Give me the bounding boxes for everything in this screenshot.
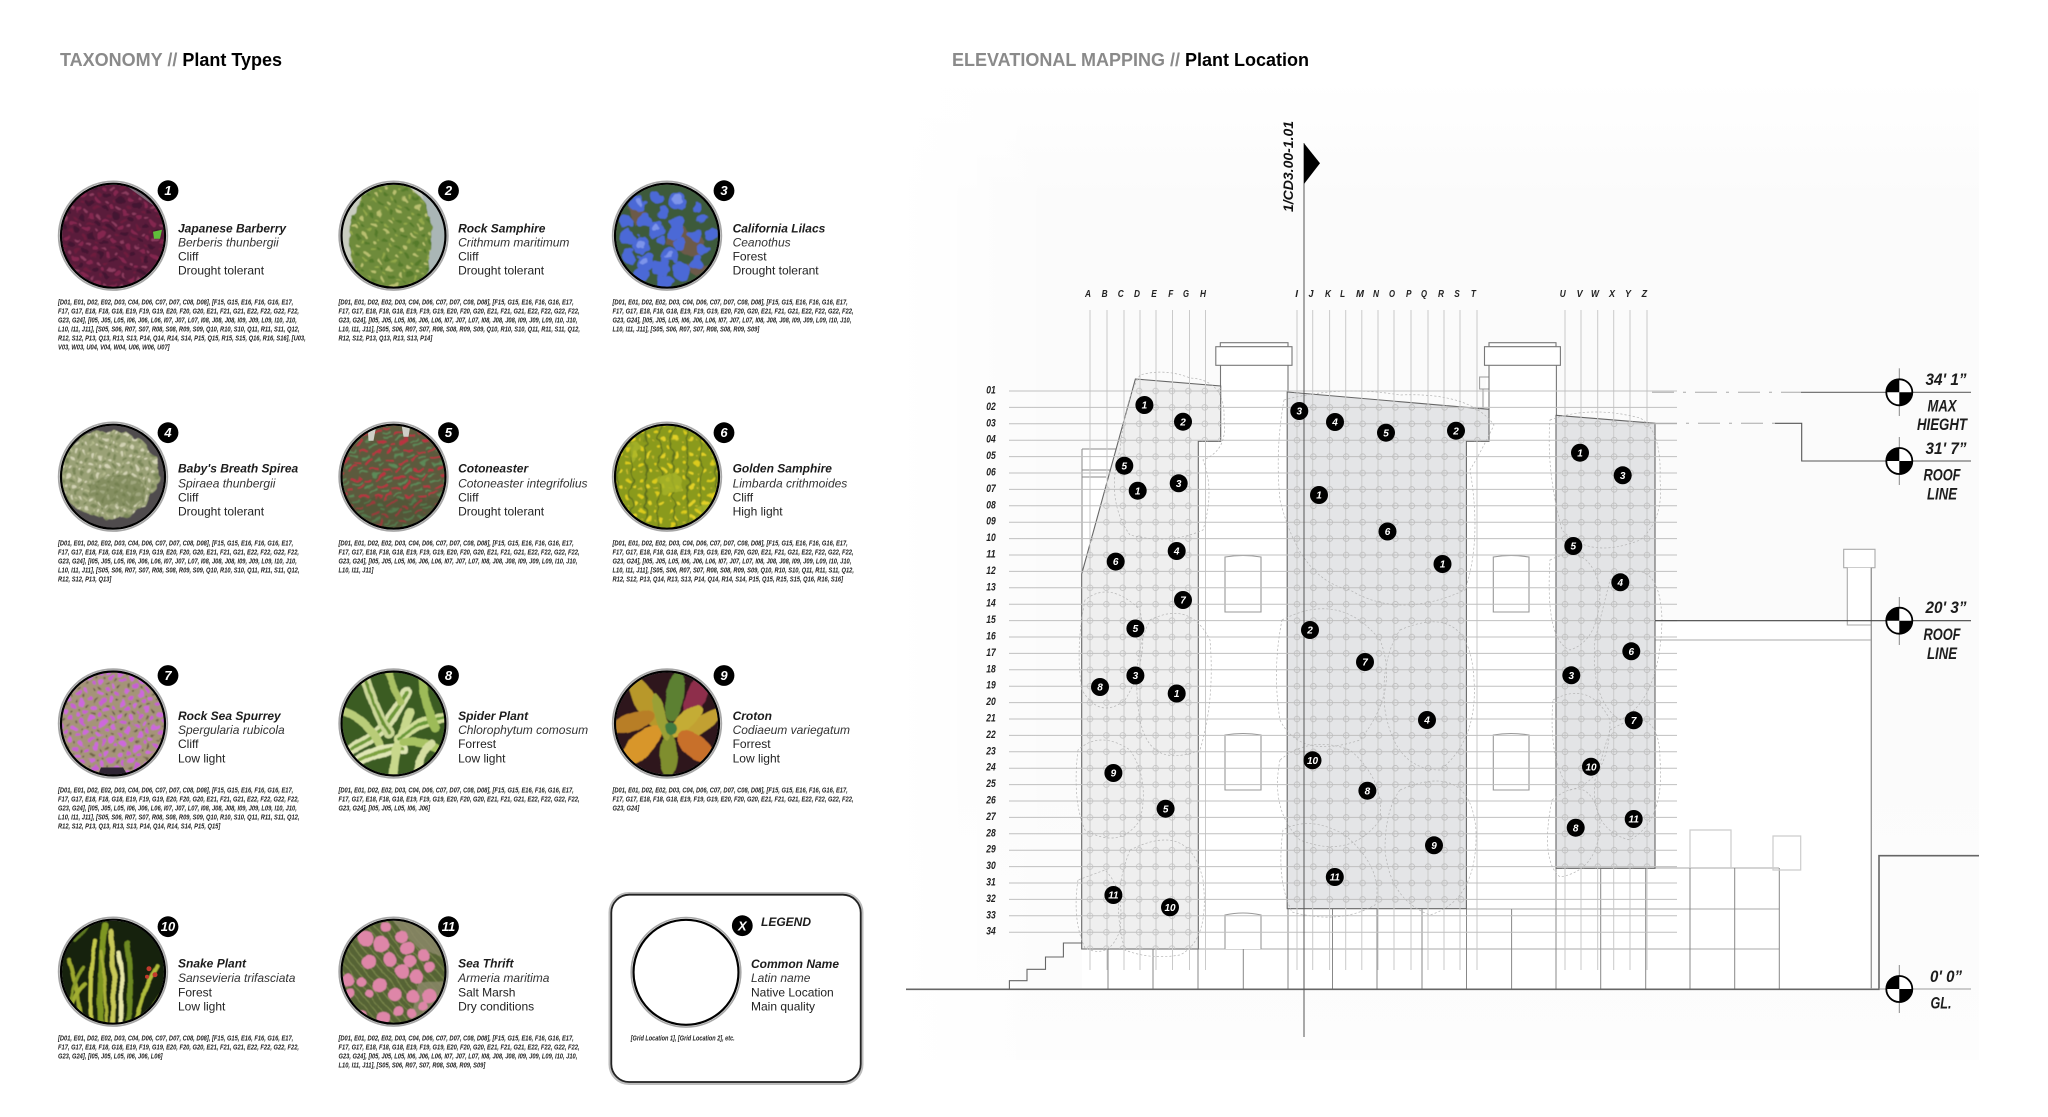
grid locations: F17, G17, E18, F18, G18, E19, F19, G19, E20, F20, G20, E21, F21, G21, E22, F22, G22, F22, — [338, 1044, 580, 1052]
row numbers: 03 — [986, 417, 996, 429]
plant markers panel 3: 5 — [1571, 542, 1577, 553]
level marker: roof line 31 ft 7 — [1655, 423, 1971, 503]
number badge 4 — [158, 422, 178, 443]
plant markers panel 3: 3 — [1569, 671, 1575, 682]
plant markers panel 1: 6 — [1113, 557, 1119, 568]
row numbers: 22 — [985, 729, 996, 741]
plant description: Drought tolerant — [458, 505, 545, 519]
column letters: Y — [1625, 288, 1632, 300]
legend key text: Latin name — [751, 971, 811, 985]
row numbers: 28 — [985, 827, 996, 839]
grid locations: G23, G24], [I05, J05, L05, I06, J06, L06, I07, J07, L07, I08, J08, J08, I09, J09, L09, I10, J10, — [338, 558, 577, 566]
photo: Sea Thrift — [338, 916, 449, 1027]
column letters: J — [1308, 288, 1314, 300]
chart: elevation drawing — [906, 80, 1979, 1060]
photo: Croton — [612, 668, 722, 779]
plant markers panel 1: 1 — [1142, 401, 1148, 412]
column letters: B — [1102, 288, 1108, 300]
grid locations: [D01, E01, D02, E02, D03, C04, D06, C07, D07, C08, D08], [F15, G15, E16, F16, G16, E17, — [338, 787, 574, 795]
plant description: Forest — [733, 249, 767, 263]
plant description: Low light — [178, 752, 226, 766]
level marker: max height: 34' 1” — [1926, 370, 1967, 389]
card: Croton — [607, 664, 854, 813]
number badge 5: 5 — [445, 425, 453, 440]
grid locations: F17, G17, E18, F18, G18, E19, F19, G19, E20, F20, G20, E21, F21, G21, E22, F22, G22, F22, — [612, 308, 854, 316]
grid locations: L10, I11, J11] — [338, 567, 374, 575]
row numbers: 32 — [986, 893, 996, 905]
plant markers panel 1: 7 — [1180, 596, 1186, 607]
plant markers panel 2 — [1290, 402, 1465, 886]
plant markers panel 1: 1 — [1174, 689, 1180, 700]
plant description: Ceanothus — [733, 235, 791, 249]
plant description — [733, 709, 850, 766]
heading: taxonomy: TAXONOMY // Plant Types — [60, 50, 282, 70]
number badge 6 — [714, 422, 734, 443]
grid locations: F17, G17, E18, F18, G18, E19, F19, G19, E20, F20, G20, E21, F21, G21, E22, F22, G22, F22, — [612, 549, 854, 557]
plant description: Cliff — [178, 249, 199, 263]
plant description: Cliff — [178, 737, 199, 751]
column letters: D — [1134, 288, 1140, 300]
row numbers: 18 — [986, 663, 996, 675]
plant description: Drought tolerant — [733, 264, 819, 278]
grid locations: G23, G24], [I05, J05, L05, I06, J06] — [338, 805, 431, 813]
grid locations: [D01, E01, D02, E02, D03, C04, D06, C07, D07, C08, D08], [F15, G15, E16, F16, G16, E17, — [612, 540, 848, 548]
number badge 5 — [438, 422, 459, 443]
column letters: R — [1438, 288, 1444, 300]
plant description: Forest — [178, 985, 213, 999]
grid locations: G23, G24], [I05, J05, L05, I06, J06, L06, I07, J07, L07, I08, J08, J08, I09, J09, L09, I10, J10, — [338, 317, 577, 325]
row numbers: 25 — [985, 778, 996, 790]
plant description — [457, 957, 550, 1014]
plant description — [178, 222, 287, 278]
row numbers: 16 — [986, 630, 996, 642]
grid locations: G23, G24], [I05, J05, L05, I06, J06, L06, I07, J07, L07, I08, J08, J08, I09, J09, L09, I10, J10, — [612, 558, 851, 566]
plant description: Baby's Breath Spirea — [178, 462, 299, 476]
card: Rock Sea Spurrey — [53, 664, 300, 831]
grid locations: G23, G24], [I05, J05, L05, I06, J06, L06, I07, J07, L07, I08, J08, J08, I09, J09, L09, I10, J10, — [58, 805, 297, 813]
row numbers: 01 — [986, 384, 996, 396]
row numbers: 31 — [986, 876, 996, 888]
grid locations: R12, S12, P13, Q13, R13, S13, P14] — [338, 335, 433, 343]
plant description: Armeria maritima — [457, 971, 550, 985]
plant description: Cliff — [458, 490, 479, 504]
photo: Cotoneaster — [338, 422, 449, 532]
photo: Rock Samphire — [338, 180, 449, 291]
level marker: ground level: 0' 0” — [1930, 967, 1962, 986]
column letters: H — [1200, 288, 1206, 300]
plant description: Low light — [178, 1000, 226, 1014]
number badge 2 — [438, 180, 459, 201]
plant description: Spergularia rubicola — [178, 723, 285, 737]
photo: Snake Plant — [58, 916, 168, 1027]
card: Cotoneaster — [334, 417, 588, 575]
row numbers: 14 — [986, 598, 996, 610]
grid locations: L10, I11, J11], [S05, S06, R07, S07, R08, S08, R09, S09, Q10, R10, S10, Q11, R11, S11, Q12, — [58, 567, 300, 575]
grid locations: R12, S12, P13, Q13] — [58, 576, 112, 584]
plant description: Drought tolerant — [178, 505, 265, 519]
grid locations: [D01, E01, D02, E02, D03, C04, D06, C07, D07, C08, D08], [F15, G15, E16, F16, G16, E17, — [57, 299, 293, 307]
plant description: Codiaeum variegatum — [733, 723, 850, 737]
plant description: Crithmum maritimum — [458, 235, 569, 249]
plant markers panel 3: 8 — [1573, 823, 1579, 834]
grid locations: [D01, E01, D02, E02, D03, C04, D06, C07, D07, C08, D08], [F15, G15, E16, F16, G16, E17, — [612, 787, 848, 795]
plant markers panel 1: 9 — [1111, 769, 1117, 780]
level marker: ground level — [1879, 965, 1971, 1013]
plant markers panel 1: 5 — [1122, 461, 1128, 472]
photo: Japanese Barberry — [58, 180, 168, 291]
grid locations: L10, I11, J11], [S05, S06, R07, S07, R08, S08, R09, S09, Q10, R10, S10, Q11, R11, S11, Q12, — [338, 326, 580, 334]
row numbers: 11 — [986, 548, 996, 560]
plant markers panel 2: 11 — [1330, 873, 1340, 884]
grid locations: G23, G24], [I05, J05, L05, I06, J06, L06, I07, J07, L07, I08, J08, J08, I09, J09, L09, I10, J10, — [612, 317, 851, 325]
row numbers: 15 — [986, 614, 996, 626]
row numbers: 07 — [986, 483, 996, 495]
plant markers panel 3: 11 — [1629, 815, 1639, 826]
plant markers panel 1: 1 — [1135, 486, 1141, 497]
plant description: Cliff — [178, 490, 199, 504]
row numbers: 12 — [986, 565, 996, 577]
grid locations: G23, G24] — [612, 805, 640, 813]
card: Golden Samphire — [607, 417, 854, 584]
card: Spider Plant — [334, 664, 588, 813]
row numbers: 08 — [986, 499, 996, 511]
column letters: V — [1577, 288, 1583, 300]
grid locations: F17, G17, E18, F18, G18, E19, F19, G19, E20, F20, G20, E21, F21, G21, E22, F22, G22, F22, — [338, 549, 580, 557]
plant description: Dry conditions — [458, 1000, 534, 1014]
plant description: Cliff — [733, 490, 754, 504]
row numbers — [985, 384, 996, 938]
plant description — [178, 462, 299, 519]
row numbers: 19 — [986, 680, 996, 692]
plant description: Rock Samphire — [458, 222, 546, 236]
column letters: C — [1118, 288, 1124, 300]
plant description: High light — [733, 505, 783, 519]
chimney left — [1216, 343, 1292, 392]
windows — [1225, 556, 1529, 949]
grid locations: [D01, E01, D02, E02, D03, C04, D06, C07, D07, C08, D08], [F15, G15, E16, F16, G16, E17, — [338, 1035, 574, 1043]
column letters: O — [1389, 288, 1395, 300]
plant markers panel 2: 10 — [1307, 756, 1318, 767]
plant markers panel 2: 9 — [1431, 841, 1437, 852]
plant markers panel 3: 7 — [1631, 716, 1637, 727]
number badge 9: 9 — [720, 668, 728, 683]
level marker: roof line 31 ft 7: ROOF — [1924, 466, 1961, 485]
plant description: Snake Plant — [178, 957, 247, 971]
row numbers: 13 — [986, 581, 996, 593]
row numbers: 23 — [985, 745, 996, 757]
building silhouette — [1082, 343, 1871, 989]
plant description: Chlorophytum comosum — [458, 723, 588, 737]
row numbers: 09 — [986, 516, 996, 528]
plant markers panel 3: 1 — [1577, 448, 1583, 459]
legend sample circle — [631, 918, 741, 1027]
plant description: Japanese Barberry — [178, 222, 287, 236]
plant description — [458, 462, 588, 519]
number badge 7 — [158, 665, 178, 686]
row numbers: 02 — [986, 401, 996, 413]
plant markers panel 1: 8 — [1097, 683, 1103, 694]
grid locations: F17, G17, E18, F18, G18, E19, F19, G19, E20, F20, G20, E21, F21, G21, E22, F22, G22, F22, — [58, 549, 299, 557]
plant description: Drought tolerant — [178, 264, 265, 278]
photo: Spider Plant — [338, 668, 449, 779]
chimney right — [1484, 343, 1560, 415]
plant markers panel 2: 3 — [1297, 407, 1303, 418]
column letters: W — [1591, 288, 1600, 300]
number badge 8 — [438, 665, 459, 686]
card: Snake Plant — [53, 912, 299, 1061]
plant description: Golden Samphire — [733, 462, 832, 476]
row numbers: 34 — [986, 926, 996, 938]
level marker: roof line 20 ft 3: LINE — [1927, 644, 1958, 663]
grid locations: R12, S12, P13, Q13, R13, S13, P14, Q14, R14, S14, P15, Q15, R15, S15, Q16, R16, S16], [U03, — [58, 335, 306, 343]
column letters: G — [1183, 288, 1189, 300]
number badge 1 — [158, 180, 178, 201]
grid locations: L10, I11, J11], [S05, S06, R07, S07, R08, S08, R09, S09] — [612, 326, 760, 334]
plant description: Sansevieria trifasciata — [178, 971, 296, 985]
column letters: E — [1151, 288, 1158, 300]
plant description: Forrest — [733, 737, 771, 751]
grid locations: F17, G17, E18, F18, G18, E19, F19, G19, E20, F20, G20, E21, F21, G21, E22, F22, G22, F22, — [612, 796, 854, 804]
grid locations: G23, G24], [I05, J05, L05, I06, J06, L06] — [58, 1053, 163, 1061]
plant markers panel 1: 3 — [1133, 671, 1139, 682]
plant markers panel 2: 4 — [1331, 418, 1338, 429]
row numbers: 29 — [985, 844, 996, 856]
ground line — [906, 856, 1979, 989]
plant markers panel 3: 10 — [1585, 762, 1597, 773]
number badge 3 — [714, 180, 734, 201]
plant description — [458, 709, 588, 766]
plant markers panel 1: 5 — [1133, 624, 1139, 635]
plant markers panel 2: 4 — [1423, 716, 1430, 727]
level marker: roof line 31 ft 7: 31' 7” — [1926, 439, 1967, 458]
plant markers panel 3 — [1562, 444, 1643, 837]
column letters: F — [1168, 288, 1174, 300]
small chimney — [1844, 549, 1875, 625]
plant description: Rock Sea Spurrey — [178, 709, 282, 723]
photo: California Lilacs — [612, 180, 722, 291]
panel: legend — [610, 894, 862, 1084]
number badge 11: 11 — [442, 919, 455, 934]
photo: Golden Samphire — [612, 422, 722, 532]
grid locations: V03, W03, U04, V04, W04, U06, W06, U07] — [58, 344, 170, 352]
column letters — [1084, 288, 1648, 300]
number badge 7: 7 — [164, 668, 172, 683]
plant description — [733, 462, 847, 519]
legend key text: Common Name — [751, 957, 839, 971]
grid locations: [D01, E01, D02, E02, D03, C04, D06, C07, D07, C08, D08], [F15, G15, E16, F16, G16, E17, — [612, 299, 848, 307]
plant markers panel 1: 4 — [1173, 547, 1180, 558]
plant description — [733, 222, 826, 278]
section label: 1/CD3.00-1.01 — [1280, 121, 1296, 212]
grid locations: [D01, E01, D02, E02, D03, C04, D06, C07, D07, C08, D08], [F15, G15, E16, F16, G16, E17, — [338, 540, 574, 548]
plant description: Berberis thunbergii — [178, 235, 279, 249]
plant markers panel 1 — [1091, 396, 1192, 916]
section line — [1304, 143, 1320, 1037]
card: California Lilacs — [607, 176, 854, 334]
grid locations: R12, S12, P13, Q14, R13, S13, P14, Q14, R14, S14, P15, Q15, R15, S15, Q16, R16, S16] — [612, 576, 844, 584]
wall edge line — [1870, 568, 1872, 989]
plant description: California Lilacs — [733, 222, 826, 236]
row numbers: 24 — [985, 762, 996, 774]
column letters: S — [1454, 288, 1460, 300]
grid locations: F17, G17, E18, F18, G18, E19, F19, G19, E20, F20, G20, E21, F21, G21, E22, F22, G22, F22, — [58, 1044, 299, 1052]
grid locations: L10, I11, J11], [S05, S06, R07, S07, R08, S08, R09, S09, Q10, R10, S10, Q11, R11, S11, Q12, — [58, 814, 300, 822]
level marker: roof line 20 ft 3: 20' 3” — [1925, 598, 1967, 617]
row numbers: 30 — [986, 860, 996, 872]
legend key text: Main quality — [751, 1000, 815, 1014]
level marker: ground level: GL. — [1930, 994, 1952, 1013]
grid locations: G23, G24], [I05, J05, L05, I06, J06, L06, I07, J07, L07, I08, J08, J08, I09, J09, L09, I10, J10, — [58, 317, 297, 325]
column letters: P — [1406, 288, 1412, 300]
grid locations: L10, I11, J11], [S05, S06, R07, S07, R08, S08, R09, S09, Q10, R10, S10, Q11, R11, S11, Q12, — [612, 567, 854, 575]
level marker: roof line 31 ft 7: LINE — [1927, 484, 1958, 503]
plant markers panel 3: 4 — [1617, 578, 1624, 589]
plant markers panel 2: 8 — [1365, 786, 1371, 797]
column letters: K — [1325, 288, 1332, 300]
plant description: Low light — [458, 752, 506, 766]
column letters: A — [1084, 288, 1091, 300]
legend key text: Native Location — [751, 986, 834, 1000]
photo: Rock Sea Spurrey — [58, 668, 168, 779]
plant markers panel 2: 1 — [1440, 560, 1446, 571]
plant markers panel 2: 2 — [1452, 426, 1459, 437]
plant description — [178, 709, 285, 766]
grid locations: L10, I11, J11], [S05, S06, R07, S07, R08, S08, R09, S09, Q10, R10, S10, Q11, R11, S11, Q12, — [58, 326, 300, 334]
plant markers panel 3: 3 — [1620, 471, 1626, 482]
plant markers panel 2: 6 — [1385, 527, 1391, 538]
card: Sea Thrift — [334, 912, 580, 1070]
row numbers: 06 — [986, 466, 996, 478]
column letters: Z — [1641, 288, 1648, 300]
grid nodes — [1082, 379, 1655, 949]
legend badge X — [732, 915, 753, 936]
row numbers: 17 — [986, 647, 996, 659]
number badge 4: 4 — [163, 425, 172, 440]
column letters: X — [1608, 288, 1616, 300]
number badge 3: 3 — [720, 183, 728, 198]
level marker: roof line 20 ft 3 — [1655, 597, 1971, 663]
row numbers: 05 — [986, 450, 996, 462]
structural lines — [1082, 377, 1871, 989]
column letters: U — [1560, 288, 1566, 300]
plant description: Low light — [733, 752, 781, 766]
level marker: max height: HIEGHT — [1917, 415, 1968, 434]
grid locations: G23, G24], [I05, J05, L05, I06, J06, L06, I07, J07, L07, I08, J08, J08, I09, J09, L09, I10, J10, — [58, 558, 297, 566]
number badge 10 — [158, 916, 178, 937]
column letters: I — [1295, 288, 1299, 300]
plant description: Cotoneaster integrifolius — [458, 476, 588, 490]
column letters: L — [1340, 288, 1345, 300]
plant markers panel 1: 2 — [1179, 417, 1186, 428]
plant markers panel 1: 11 — [1108, 891, 1119, 902]
legend heading: LEGEND — [761, 915, 811, 929]
grid locations: [D01, E01, D02, E02, D03, C04, D06, C07, D07, C08, D08], [F15, G15, E16, F16, G16, E17, — [338, 299, 574, 307]
legend badge X: X — [737, 918, 748, 934]
grid locations: F17, G17, E18, F18, G18, E19, F19, G19, E20, F20, G20, E21, F21, G21, E22, F22, G22, F22, — [338, 308, 580, 316]
grid locations: R12, S12, P13, Q13, R13, S13, P14, Q14, R14, S14, P15, Q15] — [58, 823, 221, 831]
number badge 9 — [714, 665, 734, 686]
number badge 2: 2 — [444, 183, 453, 198]
number badge 10: 10 — [161, 919, 176, 934]
row numbers: 04 — [986, 434, 996, 446]
plant markers panel 2: 7 — [1362, 658, 1368, 669]
card: Baby's Breath Spirea — [53, 417, 300, 584]
number badge 8: 8 — [445, 668, 453, 683]
column letters: T — [1471, 288, 1477, 300]
number badge 6: 6 — [720, 425, 728, 440]
planted wall panel 2 — [1287, 392, 1489, 909]
plant markers panel 2: 5 — [1383, 428, 1389, 439]
heading: elevational mapping: ELEVATIONAL MAPPING // Plant Location — [952, 50, 1309, 70]
left fade — [906, 80, 1056, 1060]
grid lines — [1009, 310, 1677, 970]
plant description: Limbarda crithmoides — [733, 476, 847, 490]
plant description: Sea Thrift — [458, 957, 514, 971]
row numbers: 26 — [985, 794, 996, 806]
plant markers panel 1: 10 — [1164, 903, 1176, 914]
plant description: Salt Marsh — [458, 985, 515, 999]
stairs — [1009, 943, 1082, 989]
grid locations: [D01, E01, D02, E02, D03, C04, D06, C07, D07, C08, D08], [F15, G15, E16, F16, G16, E17, — [57, 540, 293, 548]
level marker: max height — [1652, 368, 1971, 434]
plant markers panel 1: 5 — [1163, 804, 1169, 815]
plant description: Croton — [733, 709, 772, 723]
column letters: N — [1373, 288, 1379, 300]
grid locations: F17, G17, E18, F18, G18, E19, F19, G19, E20, F20, G20, E21, F21, G21, E22, F22, G22, F22, — [338, 796, 580, 804]
drawing background — [906, 80, 1979, 1060]
plant markers panel 2: 1 — [1316, 491, 1322, 502]
plant markers panel 3: 6 — [1629, 647, 1635, 658]
number badge 1: 1 — [164, 183, 172, 198]
legend key text — [751, 957, 839, 1014]
level marker: max height: MAX — [1928, 397, 1958, 416]
grid locations: F17, G17, E18, F18, G18, E19, F19, G19, E20, F20, G20, E21, F21, G21, E22, F22, G22, F22, — [58, 308, 299, 316]
row numbers: 21 — [985, 712, 996, 724]
grid locations: [D01, E01, D02, E02, D03, C04, D06, C07, D07, C08, D08], [F15, G15, E16, F16, G16, E17, — [57, 1035, 293, 1043]
dashed plant outlines — [1076, 372, 1662, 957]
plant description — [458, 222, 569, 278]
grid locations: F17, G17, E18, F18, G18, E19, F19, G19, E20, F20, G20, E21, F21, G21, E22, F22, G22, F22, — [58, 796, 299, 804]
row numbers: 27 — [985, 811, 996, 823]
plant markers panel 2: 2 — [1306, 626, 1313, 637]
grid locations: G23, G24], [I05, J05, L05, I06, J06, L06, I07, J07, L07, I08, J08, J08, I09, J09, L09, I10, J10, — [338, 1053, 577, 1061]
plant description — [178, 957, 296, 1014]
plant description: Spiraea thunbergii — [178, 476, 276, 490]
plant description: Cotoneaster — [458, 462, 529, 476]
grid locations: L10, I11, J11], [S05, S06, R07, S07, R08, S08, R09, S09] — [338, 1062, 486, 1070]
column letters: M — [1356, 288, 1364, 300]
planted wall panel 3 — [1556, 415, 1655, 868]
grid locations: [D01, E01, D02, E02, D03, C04, D06, C07, D07, C08, D08], [F15, G15, E16, F16, G16, E17, — [57, 787, 293, 795]
plant description: Cliff — [458, 249, 479, 263]
row numbers: 20 — [985, 696, 996, 708]
plant description: Forrest — [458, 737, 497, 751]
legend grid location text: [Grid Location 1], [Grid Location 2], etc. — [630, 1034, 735, 1042]
number badge 11 — [438, 916, 459, 937]
plant description: Drought tolerant — [458, 264, 545, 278]
plant description: Spider Plant — [458, 709, 529, 723]
row numbers: 10 — [986, 532, 996, 544]
planted wall panel 1 — [1082, 379, 1221, 949]
card: Rock Samphire — [334, 176, 580, 343]
level marker: roof line 20 ft 3: ROOF — [1924, 625, 1961, 644]
card: Japanese Barberry — [53, 176, 306, 352]
column letters: Q — [1421, 288, 1427, 300]
row numbers: 33 — [986, 909, 996, 921]
plant markers panel 1: 3 — [1176, 479, 1182, 490]
photo: Baby's Breath Spirea — [58, 422, 168, 532]
